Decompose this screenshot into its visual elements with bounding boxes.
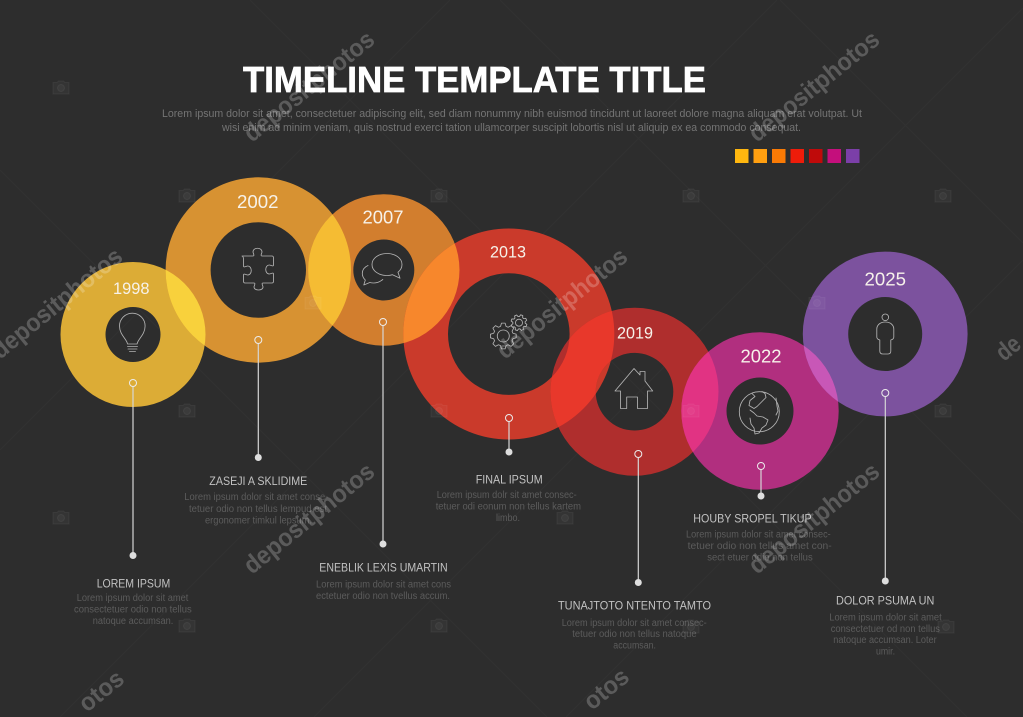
year 2022: 2022 — [740, 347, 782, 367]
description: Lorem ipsum dolor sit amet consec- — [562, 618, 707, 629]
ring: 2013 — [403, 229, 614, 440]
description: natoque accumsan. Loter — [833, 635, 937, 646]
stock watermark: text: depositphotos — [238, 25, 380, 148]
description: natoque accumsan. — [93, 616, 173, 627]
ring: 1998 — [60, 262, 206, 407]
milestone 2022 — [686, 347, 832, 564]
milestone 2007 — [316, 208, 451, 602]
description: Lorem ipsum dolor sit amet — [829, 612, 942, 624]
stock watermark: text: depositphotos — [491, 242, 633, 365]
ring: 2007 — [308, 194, 460, 346]
description: Lorem ipsum dolor sit amet conse- — [184, 492, 328, 503]
description: tetuer odio non tellus amet con- — [688, 541, 832, 552]
stock watermark: text: otos — [578, 662, 635, 716]
description: accumsan. — [613, 640, 656, 652]
icon: speech bubbles — [362, 254, 402, 285]
year 2002: 2002 — [237, 192, 278, 212]
description: Lorem ipsum dolr sit amet consec- — [437, 490, 577, 501]
overlap: 2022 and 2025 — [804, 346, 838, 402]
description — [184, 492, 328, 526]
description: Lorem ipsum dolor sit amet — [77, 593, 188, 604]
description — [829, 612, 942, 658]
stock watermark: camera marks — [53, 81, 954, 633]
milestone 1998 — [74, 279, 192, 627]
milestone 2002 — [184, 192, 328, 526]
milestone 2013 — [436, 243, 581, 524]
description: tetuer odio non tellus natoque — [572, 629, 697, 640]
connector pin — [635, 450, 642, 586]
title: TIMELINE TEMPLATE TITLE — [243, 59, 706, 100]
heading: FINAL IPSUM — [476, 472, 543, 486]
overlap: 2013 and 2019 — [550, 311, 614, 427]
heading: DOLOR PSUMA UN — [836, 594, 934, 608]
description: consectetuer odio non tellus — [74, 604, 192, 616]
colour palette swatches — [735, 149, 860, 163]
icon: house — [615, 368, 653, 408]
description: umir. — [876, 646, 895, 658]
description: ergonomer timkul lepsum. — [205, 516, 312, 526]
heading: HOUBY SROPEL TIKUP — [693, 512, 812, 526]
description: Lorem ipsum dolor sit amet cons — [316, 580, 451, 590]
description — [436, 490, 581, 524]
heading: TUNAJTOTO NTENTO TAMTO — [558, 598, 711, 612]
icon: globe — [739, 392, 779, 434]
year 2013: 2013 — [490, 243, 526, 262]
description — [686, 530, 832, 564]
overlap: 1998 and 2002 — [166, 270, 206, 346]
stock watermark: text: depositphotos — [743, 457, 885, 580]
overlap: 2002 and 2007 — [308, 214, 351, 326]
intro text — [162, 108, 862, 134]
connector pin — [255, 336, 262, 461]
milestone 2019 — [558, 324, 711, 652]
year 2007: 2007 — [362, 208, 404, 228]
overlap: 2007 and 2013 — [403, 244, 460, 343]
description: sect etuer odio non tellus — [707, 552, 813, 564]
ring: 2019 — [550, 308, 718, 476]
description: consectetuer od non tellus — [831, 624, 940, 635]
ring: 2002 — [166, 177, 351, 363]
connector pin — [130, 380, 136, 559]
icon: puzzle piece — [242, 248, 274, 290]
description: Lorem ipsum dolor sit amet consec- — [686, 530, 831, 540]
description: limbo. — [496, 513, 520, 524]
connector pin — [758, 462, 764, 500]
connector pin — [380, 318, 386, 548]
description: tetuer odi eonum non tellus kartem — [436, 502, 581, 512]
connector pin — [882, 390, 889, 584]
milestone 2025 — [829, 269, 942, 658]
icon: light bulb — [120, 313, 145, 352]
description — [562, 618, 707, 652]
icon: person — [877, 314, 894, 354]
year 2019: 2019 — [617, 324, 653, 343]
intro text: wisi enim ad minim veniam, quis nostrud exerci tation ullamcorper suscipit lobortis nisl ut aliquip ex ea commodo consequat. — [221, 122, 801, 134]
year 1998: 1998 — [113, 279, 150, 298]
heading: ZASEJI A SKLIDIME — [209, 474, 307, 488]
stock watermark: text: depositphotos — [743, 25, 885, 148]
description: tetuer odio non tellus lempud est — [189, 504, 327, 515]
ring: 2025 — [803, 252, 968, 416]
description: ectetuer odio non tvellus accum. — [316, 591, 450, 602]
icon: gears — [490, 312, 529, 349]
stock watermark: text: depositphotos — [238, 457, 380, 580]
year 2025: 2025 — [864, 269, 906, 289]
intro text: Lorem ipsum dolor sit amet, consectetuer adipiscing elit, sed diam nonummy nibh euismod tincidunt ut laoreet dolore magna aliquam erat volutpat. Ut — [162, 108, 862, 120]
description — [74, 593, 192, 627]
description — [316, 580, 451, 602]
connector pin — [506, 414, 512, 456]
stock watermark: text: otos — [73, 664, 130, 717]
heading: LOREM IPSUM — [97, 576, 170, 590]
overlap: 2019 and 2022 — [681, 352, 718, 452]
ring: 2022 — [681, 332, 839, 490]
heading: ENEBLIK LEXIS UMARTIN — [319, 561, 448, 575]
